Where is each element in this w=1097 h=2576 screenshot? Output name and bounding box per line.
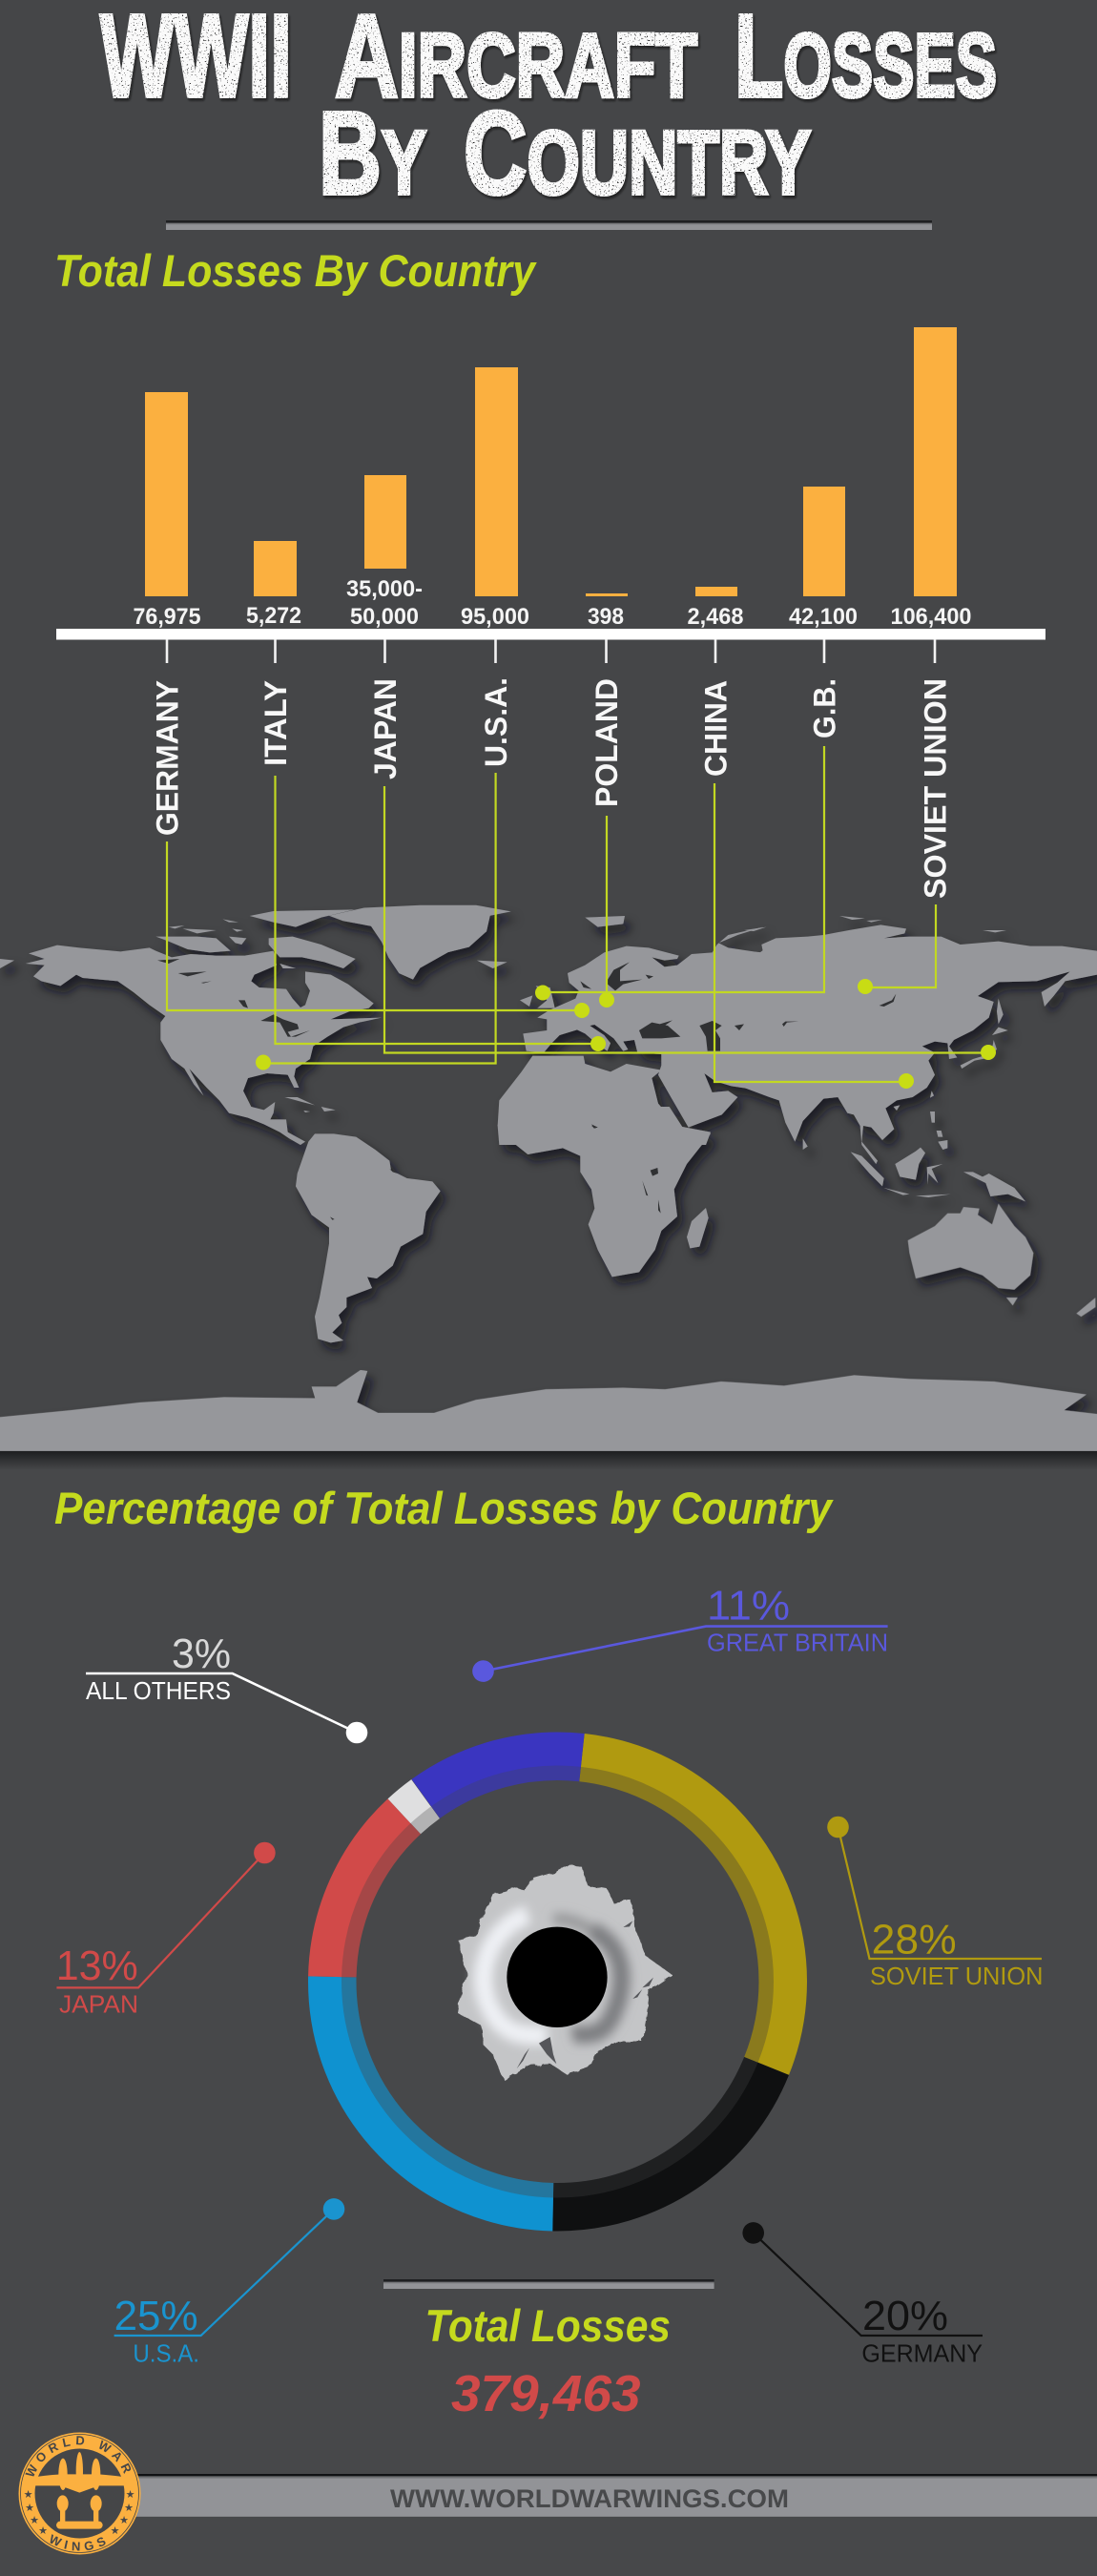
badge stars: ★: [119, 2515, 129, 2526]
Southeast Asia and Oceania: [803, 1111, 1025, 1201]
badge stars: [24, 2489, 135, 2537]
callout: Soviet Union 28%: [827, 1817, 1044, 1990]
eastern Eurasia: [744, 916, 1097, 1164]
callout: USA 25%: [114, 2198, 344, 2368]
callout: Soviet Union 28%: 28%: [872, 1916, 957, 1963]
leader: Italy: [275, 776, 606, 1051]
world map: [0, 905, 1097, 1451]
label: Poland: POLAND: [590, 678, 624, 807]
country labels: [151, 677, 952, 899]
label: Germany: GERMANY: [151, 680, 185, 836]
Greenland: [329, 905, 511, 980]
Africa: [498, 1056, 711, 1277]
value: Italy: 5,272: [246, 603, 301, 629]
label: Japan: JAPAN: [368, 678, 403, 779]
Australia and New Zealand: [908, 1204, 1095, 1317]
heading: percentage of total losses: Percentage of Total Losses by Country: [54, 1483, 835, 1533]
segment: All Others: [324, 1749, 790, 2214]
value: Great Britain: 42,100: [789, 604, 858, 630]
callout: USA 25%: 25%: [114, 2293, 198, 2339]
badge stars: ★: [126, 2489, 135, 2501]
icon: bullet hole: [458, 1863, 673, 2080]
callout: USA 25%: U.S.A.: [133, 2339, 199, 2368]
leader: USA: [256, 773, 496, 1070]
label: Italy: ITALY: [259, 680, 293, 766]
heading: total losses by country: Total Losses By Country: [54, 245, 538, 296]
bar chart: [56, 327, 1045, 639]
badge stars: ★: [38, 2525, 48, 2537]
title: [100, 0, 997, 219]
segment: Soviet Union: [324, 1749, 790, 2214]
label: Great Britain: G.B.: [807, 678, 841, 738]
lakes and inland seas: [157, 959, 896, 1220]
North America: [0, 909, 382, 1145]
map section bottom shadow: [0, 1451, 1097, 1470]
value: Poland: 398: [588, 604, 624, 630]
value: Soviet Union: 106,400: [891, 604, 971, 630]
callout: Germany 20%: [742, 2222, 983, 2368]
leader lines and location dots: [167, 746, 996, 1089]
badge text: wings: WINGS: [50, 2534, 106, 2551]
leader: Germany: [167, 841, 590, 1018]
label: China: CHINA: [698, 680, 733, 777]
value: USA: 95,000: [461, 604, 529, 630]
value: Japan: [346, 576, 423, 630]
bar: USA: [475, 367, 518, 596]
bar: Italy: [254, 541, 297, 596]
callout: Japan 13%: [56, 1842, 276, 2019]
South America: [296, 1133, 441, 1342]
bar: Poland: [586, 593, 628, 596]
segment: Japan: [324, 1749, 790, 2214]
bar: China: [695, 587, 737, 596]
badge stars: ★: [30, 2515, 39, 2526]
callout: All Others 3%: 3%: [172, 1631, 231, 1677]
callout: Germany 20%: GERMANY: [861, 2339, 983, 2368]
title: BY: [319, 89, 426, 219]
segment: Germany: [324, 1749, 790, 2214]
callout: Japan 13%: JAPAN: [59, 1990, 138, 2019]
footer url: WWW.WORLDWARWINGS.COM: [390, 2484, 789, 2513]
total losses label: Total Losses: [425, 2300, 671, 2351]
bar: Germany: [145, 392, 188, 596]
callout: Germany 20%: 20%: [862, 2293, 948, 2339]
bar: Japan: [364, 475, 406, 569]
footer bar: [114, 2474, 1097, 2517]
badge stars: ★: [24, 2489, 33, 2501]
leader: Poland: [599, 816, 614, 1008]
callout: Soviet Union 28%: SOVIET UNION: [870, 1962, 1044, 1990]
value: Japan: 50,000: [350, 604, 419, 630]
bar: Soviet Union: [914, 327, 957, 596]
callout: All Others 3%: [86, 1631, 367, 1743]
value: China: 2,468: [687, 604, 744, 630]
value: Japan: 35,000-: [346, 576, 423, 602]
badge stars: ★: [25, 2503, 34, 2514]
title divider: [166, 220, 932, 230]
label: USA: U.S.A.: [479, 677, 513, 767]
chart axis: [56, 629, 1045, 639]
Madagascar: [687, 1208, 709, 1248]
callout: Great Britain 11%: [472, 1583, 888, 1682]
total divider: [383, 2279, 714, 2289]
badge stars: ★: [124, 2503, 134, 2514]
lower section background: [0, 1451, 1097, 2576]
value: Germany: 76,975: [134, 604, 200, 630]
badge stars: ★: [111, 2525, 120, 2537]
donut chart: [233, 1656, 882, 2307]
callout: Japan 13%: 13%: [56, 1942, 138, 1989]
callout: Great Britain 11%: 11%: [707, 1583, 790, 1630]
callout: Great Britain 11%: GREAT BRITAIN: [707, 1629, 888, 1657]
western Eurasia: [477, 916, 776, 1128]
bar: Great Britain: [803, 487, 845, 596]
segment: Great Britain: [233, 1656, 882, 2307]
title: COUNTRY: [464, 89, 811, 219]
Antarctica: [0, 1370, 1097, 1451]
total losses value: 379,463: [451, 2365, 641, 2422]
badge text: world war: WORLD WAR: [25, 2436, 132, 2477]
leader: Soviet Union: [858, 904, 936, 994]
segment: USA: [324, 1749, 790, 2214]
logo badge: [19, 2433, 141, 2555]
label: Soviet Union: SOVIET UNION: [918, 678, 952, 899]
leader: China: [714, 783, 914, 1089]
callout: All Others 3%: ALL OTHERS: [86, 1676, 231, 1705]
icon: P-38 plane: [25, 2452, 135, 2529]
leader: Japan: [384, 786, 996, 1060]
leader: Great Britain: [535, 746, 824, 1000]
